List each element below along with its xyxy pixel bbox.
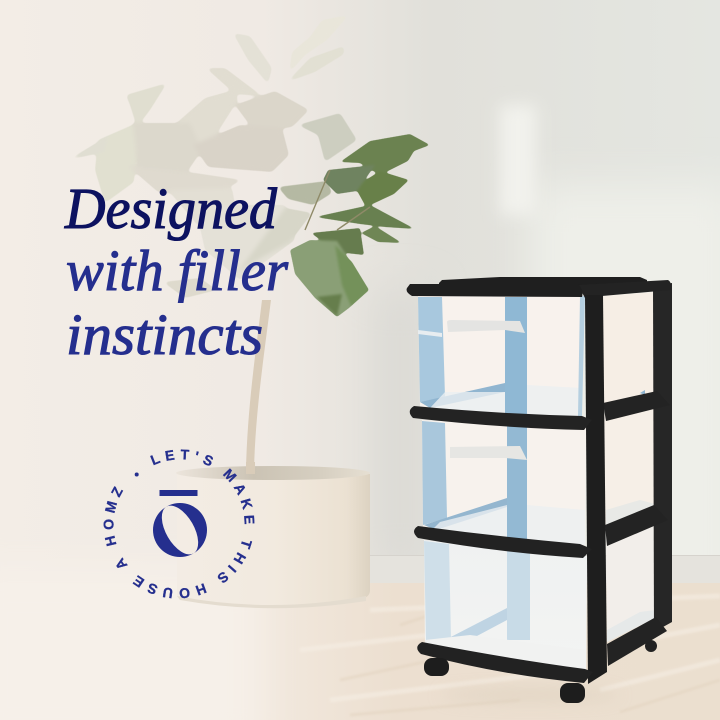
plant: green leaves [290,134,430,317]
drawer handle 2 [414,526,592,558]
drawer 3 [424,540,587,672]
badge circular slogan: LET'S MAKE THIS HOUSE A HOMZ [104,449,254,598]
drawer 2 [422,420,586,545]
badge dot [135,472,139,476]
drawer 1 [418,296,585,418]
wooden floor [0,565,720,720]
plant: faded leaves [68,15,357,298]
headline line: with filler: with filler [66,238,288,303]
plant trunk [246,300,271,472]
frame: side rails [578,280,671,666]
drawer handle 3 [417,642,593,683]
wheel shadow [440,689,620,701]
side window panels [602,292,655,642]
front wheels [424,658,585,703]
drawer handle 1 [410,406,592,430]
logo macron bar [160,490,198,496]
plant pot [176,462,370,608]
logo letter o [153,503,207,557]
storage drawer unit [407,277,672,703]
frame: front post [585,295,607,684]
top lid [439,277,647,285]
headline [64,176,288,367]
plant stems [305,170,370,230]
baseboard [340,555,720,583]
top rail [407,284,582,297]
back wheel [645,640,657,652]
frame: back post [653,283,672,632]
headline line: Designed: Designed [64,176,278,241]
headline line: instincts: instincts [66,302,263,367]
circular badge logo [104,449,254,598]
